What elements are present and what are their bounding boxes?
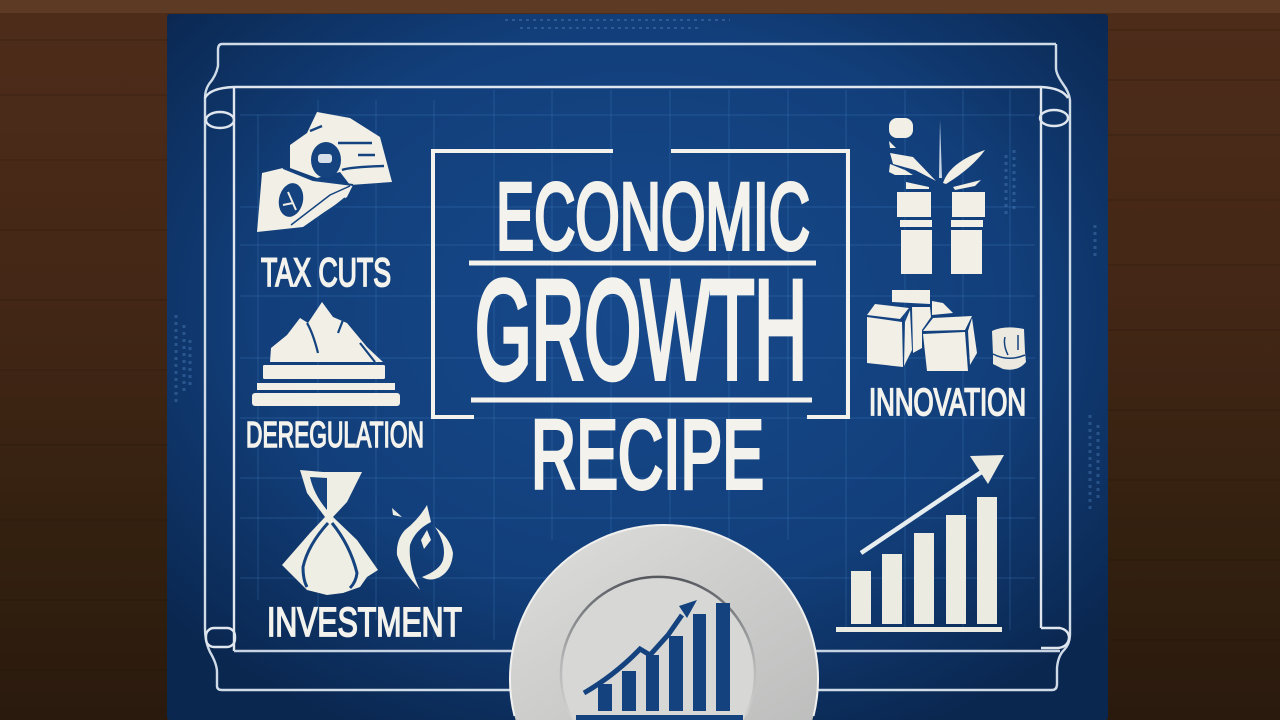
title frame xyxy=(433,151,848,417)
bar chart with arrow xyxy=(836,455,1004,632)
icon: swirl leaf xyxy=(392,505,453,590)
icon: banknotes xyxy=(257,112,392,232)
blueprint board xyxy=(167,14,1108,720)
top-left roll ring xyxy=(206,112,234,128)
bottom-right roll ring xyxy=(1041,628,1069,648)
icon: stacked mound xyxy=(252,302,400,406)
plate arrow xyxy=(584,600,697,693)
panel: innovation xyxy=(867,118,1026,424)
title: GROWTH xyxy=(475,251,807,408)
icon: cubes xyxy=(867,290,977,371)
arrow xyxy=(861,455,1004,553)
icon: small jar xyxy=(992,327,1026,370)
plate bar chart xyxy=(576,600,743,720)
blueprint grid xyxy=(240,90,1035,640)
panel: investment xyxy=(267,470,462,645)
bottom-left roll ring xyxy=(206,628,235,647)
label: investment: INVESTMENT xyxy=(267,599,462,645)
plate with chart xyxy=(510,525,818,720)
title xyxy=(475,164,810,509)
title: RECIPE xyxy=(531,400,764,509)
label: deregulation: DEREGULATION xyxy=(246,414,424,455)
top-right roll ring xyxy=(1040,110,1068,126)
label: innovation: INNOVATION xyxy=(869,382,1026,424)
title: ECONOMIC xyxy=(496,164,810,270)
icon: money sack xyxy=(282,470,378,595)
icon: gift box with leaves xyxy=(889,118,985,274)
panel: tax cuts xyxy=(257,112,392,295)
label: tax cuts: TAX CUTS xyxy=(261,251,391,295)
worn texture marks xyxy=(176,20,1098,510)
panel: deregulation xyxy=(246,302,424,455)
scroll frame xyxy=(205,44,1070,690)
